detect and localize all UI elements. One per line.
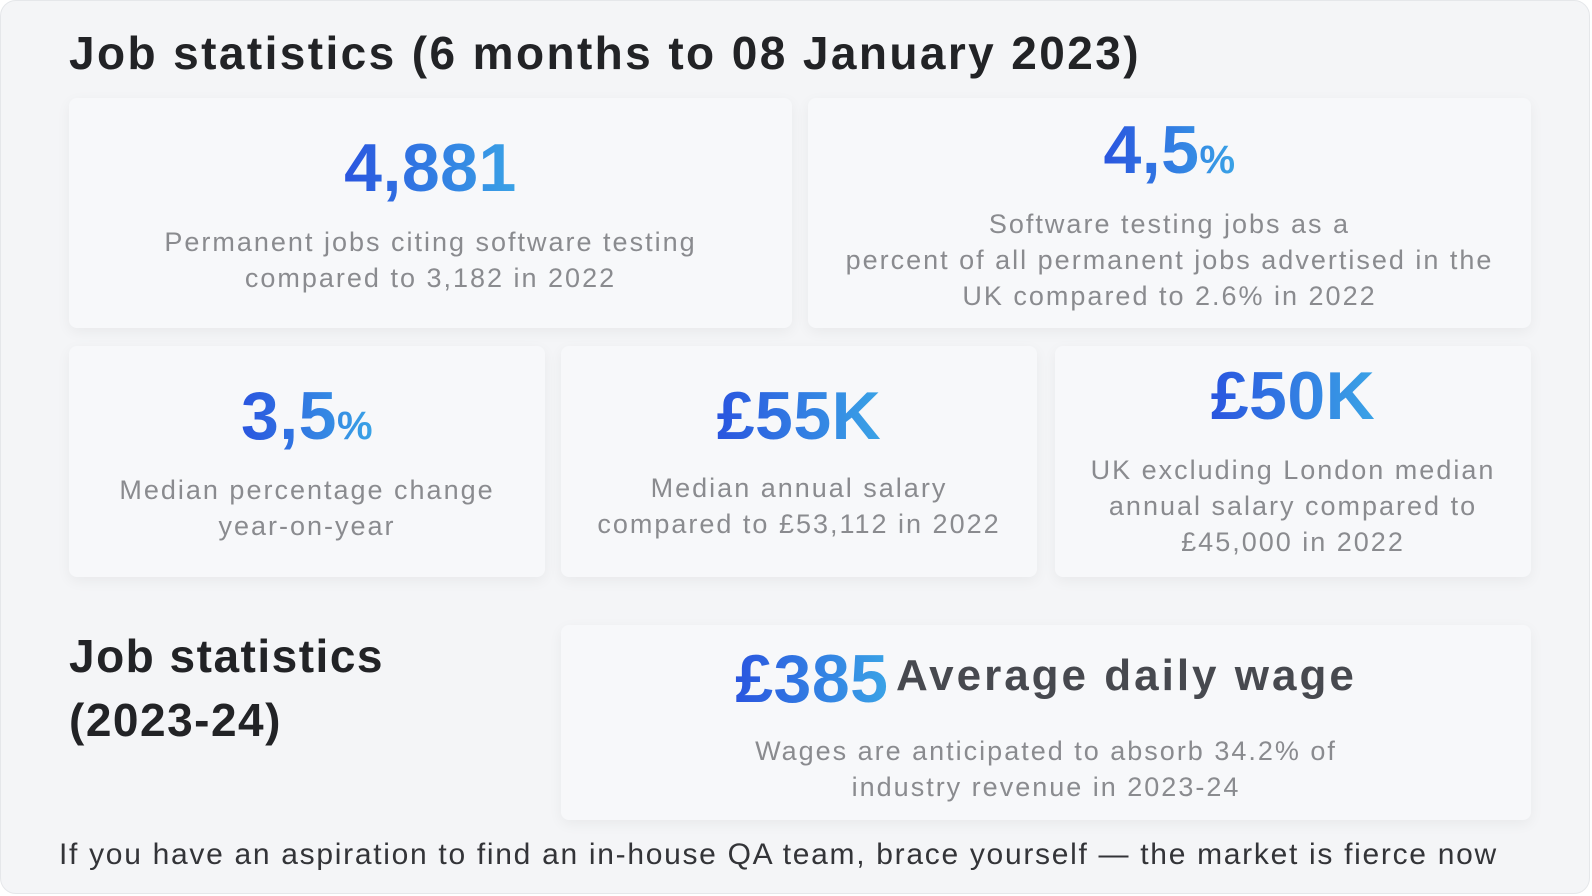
card: percent of jobs [808, 98, 1531, 328]
description: UK excluding London median [1091, 455, 1495, 485]
description: compared to 3,182 in 2022 [245, 263, 616, 293]
description: Permanent jobs citing software testing [164, 227, 697, 257]
description: industry revenue in 2023-24 [852, 772, 1240, 802]
description: Median percentage change [119, 475, 495, 505]
description [119, 475, 495, 541]
section heading 2023-24: Job statistics [69, 630, 384, 682]
big number: £50K [1211, 358, 1375, 434]
description [755, 736, 1337, 802]
description [164, 227, 697, 293]
description [597, 473, 1001, 539]
card: UK excl London [1055, 346, 1531, 577]
title: Job statistics (6 months to 08 January 2023) [69, 27, 1141, 79]
card: median change [69, 346, 545, 577]
section heading 2023-24: (2023-24) [69, 694, 282, 746]
big number: 4,5% [1103, 112, 1236, 188]
headline: Average daily wage [896, 651, 1357, 700]
description: year-on-year [218, 511, 396, 541]
description: £45,000 in 2022 [1181, 527, 1405, 557]
description [846, 209, 1493, 311]
description: Software testing jobs as a [989, 209, 1350, 239]
card: daily wage [561, 625, 1531, 820]
footer text: If you have an aspiration to find an in-house QA team, brace yourself — the market is fierce now [59, 838, 1498, 871]
card: median salary [561, 346, 1037, 577]
description: annual salary compared to [1109, 491, 1477, 521]
headline [735, 641, 1357, 717]
description: percent of all permanent jobs advertised in the [846, 245, 1493, 275]
headline: £385 [735, 641, 888, 717]
description: Median annual salary [651, 473, 947, 503]
section heading 2023-24 [69, 630, 384, 746]
description: UK compared to 2.6% in 2022 [962, 281, 1377, 311]
big number: £55K [717, 378, 881, 454]
description: compared to £53,112 in 2022 [597, 509, 1001, 539]
card: permanent jobs [69, 98, 792, 328]
description [1091, 455, 1495, 557]
description: Wages are anticipated to absorb 34.2% of [755, 736, 1337, 766]
big number: 3,5% [241, 378, 373, 454]
big number: 4,881 [344, 130, 517, 206]
